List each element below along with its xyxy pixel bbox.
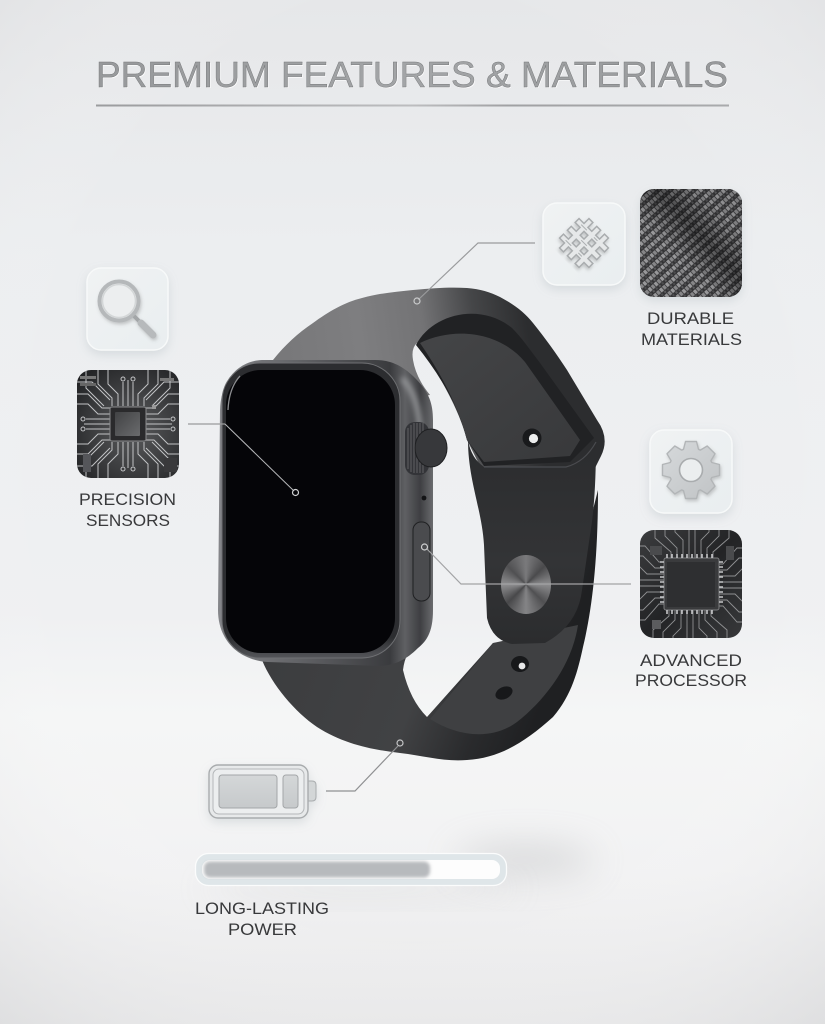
panel: precision sensors	[77, 268, 179, 526]
watch case	[218, 360, 433, 666]
watch illustration	[218, 288, 605, 760]
side button	[413, 522, 430, 601]
panel: long-lasting power	[195, 765, 506, 939]
circuit board image	[77, 370, 179, 478]
label: SENSORS	[86, 511, 170, 530]
label: PRECISION	[79, 490, 176, 509]
panel: advanced processor	[631, 430, 751, 690]
floor shadow	[200, 846, 595, 894]
label: ADVANCED	[640, 651, 742, 670]
title: PREMIUM FEATURES & MATERIALS	[96, 54, 728, 95]
icon: magnifying glass	[87, 268, 168, 350]
watch band: upper strap	[273, 288, 605, 478]
watch band: keeper flap	[468, 440, 596, 644]
watch band: lower strap	[262, 490, 598, 760]
panel: durable materials	[543, 189, 742, 349]
title: PREMIUM FEATURES & MATERIALS	[97, 55, 729, 96]
callout: durable materials line	[414, 243, 535, 304]
carbon fibre swatch	[640, 189, 742, 297]
label	[79, 490, 176, 530]
label: LONG-LASTING	[195, 899, 329, 918]
icon: battery	[209, 765, 316, 818]
label	[195, 899, 329, 939]
callout: advanced processor line	[422, 544, 631, 584]
sensor disc	[501, 555, 551, 614]
title underline	[96, 104, 729, 106]
label	[635, 651, 747, 690]
icon: woven lattice	[543, 203, 625, 285]
processor image	[640, 530, 742, 638]
label	[641, 309, 742, 349]
power bar	[196, 854, 506, 886]
callout: long-lasting power line	[326, 740, 403, 791]
callout: precision sensors line	[188, 424, 298, 496]
icon: gear	[650, 430, 732, 513]
microphone dot	[422, 496, 426, 500]
label: PROCESSOR	[635, 671, 747, 690]
label: POWER	[228, 920, 297, 939]
label: MATERIALS	[641, 330, 742, 349]
label: DURABLE	[647, 309, 734, 328]
digital crown	[405, 422, 447, 475]
